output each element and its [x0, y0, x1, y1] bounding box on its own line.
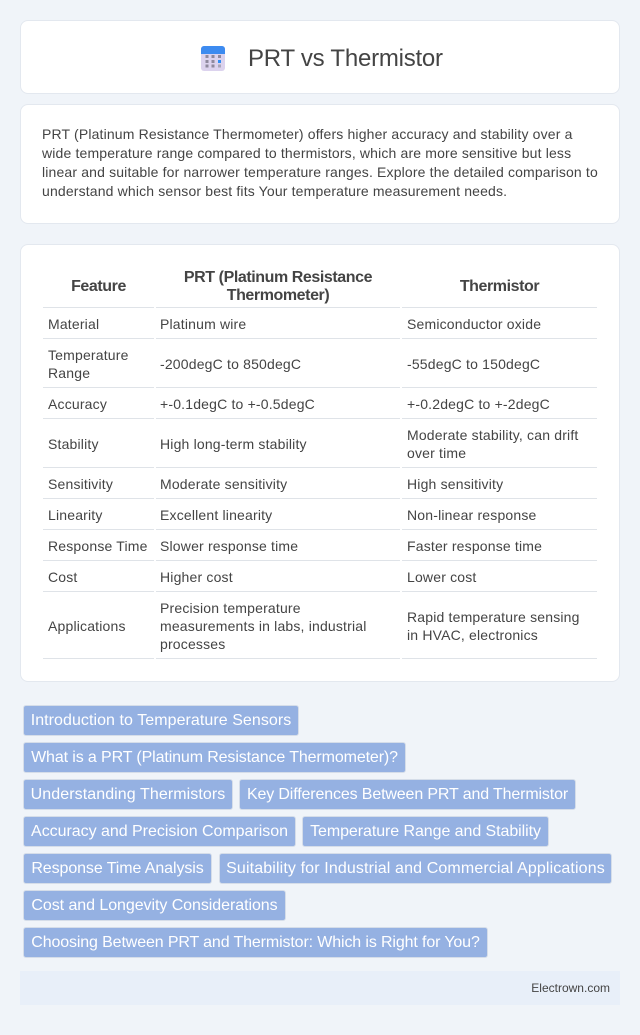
intro text [42, 126, 598, 199]
footer credit: Electrown.com [531, 981, 610, 995]
tag [302, 816, 549, 847]
tag: Suitability for Industrial and Commercial Applications [226, 860, 605, 877]
row: accuracy: +-0.2degC to +-2degC [407, 396, 550, 412]
table header [71, 269, 540, 304]
row: linearity: Linearity [48, 507, 103, 523]
row: material: Platinum wire [160, 316, 246, 332]
row: sensitivity: High sensitivity [407, 476, 503, 492]
row: temperature range [48, 347, 540, 381]
row: response time: Faster response time [407, 538, 542, 554]
tag: Introduction to Temperature Sensors [31, 712, 291, 729]
row: linearity: Excellent linearity [160, 507, 272, 523]
row: stability: over time [407, 445, 466, 461]
row: response time: Slower response time [160, 538, 298, 554]
row: linearity: Non-linear response [407, 507, 536, 523]
tag: Temperature Range and Stability [310, 823, 541, 840]
comparison table panel [20, 244, 620, 682]
tag: Cost and Longevity Considerations [31, 897, 278, 914]
tag: Choosing Between PRT and Thermistor: Which is Right for You? [31, 934, 480, 951]
row: cost: Cost [48, 569, 78, 585]
row: cost [48, 569, 476, 585]
tag: Key Differences Between PRT and Thermistor [247, 786, 568, 803]
intro card [20, 104, 620, 224]
row: sensitivity [48, 476, 504, 492]
row: accuracy [48, 396, 550, 412]
row: temperature range: Temperature [48, 347, 129, 363]
row: temperature range: -55degC to 150degC [407, 356, 540, 372]
tag [23, 779, 233, 810]
row: linearity [48, 507, 536, 523]
row: stability: Moderate stability, can drift [407, 427, 578, 443]
row: accuracy: Accuracy [48, 396, 107, 412]
row: cost: Lower cost [407, 569, 476, 585]
row: accuracy: +-0.1degC to +-0.5degC [160, 396, 315, 412]
intro text: PRT (Platinum Resistance Thermometer) offers higher accuracy and stability over a [42, 126, 573, 142]
row: sensitivity: Sensitivity [48, 476, 113, 492]
table header: Thermistor [460, 278, 539, 295]
row: applications: Precision temperature [160, 600, 301, 616]
tag [23, 705, 299, 736]
tag [219, 853, 612, 884]
row: cost: Higher cost [160, 569, 233, 585]
intro text: wide temperature range compared to thermistors, which are more sensitive but less [42, 145, 571, 161]
header card [20, 20, 620, 94]
tag: Understanding Thermistors [31, 786, 225, 803]
row: stability: Stability [48, 436, 99, 452]
row: response time [48, 538, 542, 554]
row: sensitivity: Moderate sensitivity [160, 476, 287, 492]
row: stability: High long-term stability [160, 436, 307, 452]
row: material: Material [48, 316, 99, 332]
footer [20, 971, 620, 1005]
row: temperature range: -200degC to 850degC [160, 356, 301, 372]
row: material [48, 316, 541, 332]
row: applications: in HVAC, electronics [407, 627, 538, 643]
table header: Feature [71, 278, 126, 295]
row: applications: processes [160, 636, 225, 652]
tag [23, 742, 406, 773]
row: applications: Rapid temperature sensing [407, 609, 580, 625]
icon: calendar [201, 46, 225, 71]
table header: Thermometer) [227, 287, 329, 304]
row: temperature range: Range [48, 365, 90, 381]
tag [23, 816, 296, 847]
row: material: Semiconductor oxide [407, 316, 541, 332]
intro text: understand which sensor best fits Your temperature measurement needs. [42, 183, 507, 199]
intro text: linear and suitable for narrower temperature ranges. Explore the detailed comparison to [42, 164, 598, 180]
tag: What is a PRT (Platinum Resistance Thermometer)? [31, 749, 398, 766]
row: applications: measurements in labs, industrial [160, 618, 367, 634]
tag [239, 779, 576, 810]
table header: PRT (Platinum Resistance [184, 269, 372, 286]
row: stability [48, 427, 578, 461]
tag: Response Time Analysis [31, 860, 204, 877]
row: applications: Applications [48, 618, 126, 634]
tag [23, 853, 212, 884]
row: response time: Response Time [48, 538, 148, 554]
row: applications [48, 600, 580, 652]
title: PRT vs Thermistor [248, 45, 443, 72]
tag: Accuracy and Precision Comparison [31, 823, 288, 840]
tag [23, 927, 488, 958]
topic tags [23, 705, 612, 958]
tag [23, 890, 286, 921]
